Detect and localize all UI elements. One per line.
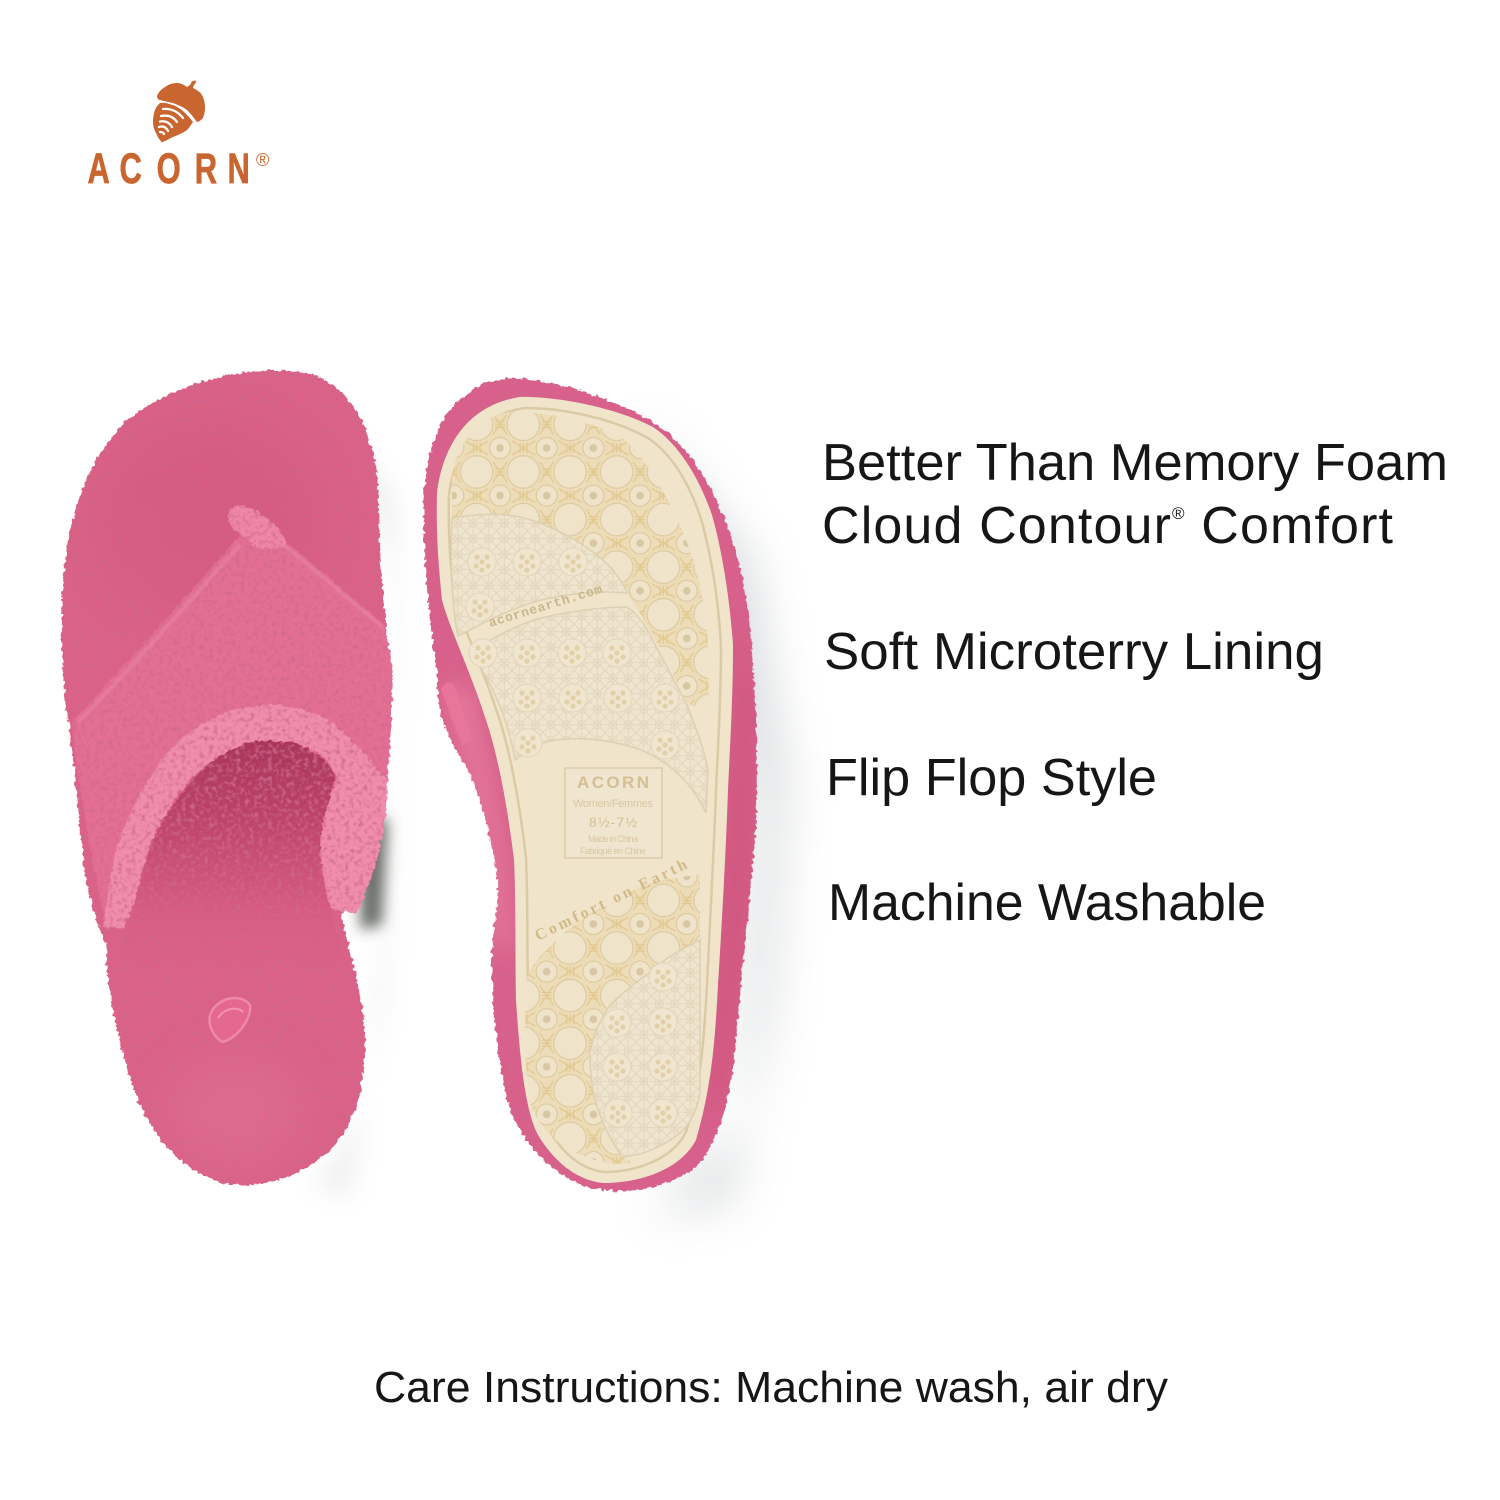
strap peeking out	[441, 682, 472, 745]
feature: memory foam: Better Than Memory Foam	[822, 434, 1448, 492]
strap	[72, 505, 393, 932]
sole website text: acornearth.com	[487, 582, 604, 631]
care instructions: Care Instructions: Machine wash, air dry	[374, 1363, 1168, 1412]
terry edge of sole	[423, 378, 757, 1191]
heel tread	[525, 875, 700, 1164]
thong post	[228, 506, 286, 549]
midfoot lobe B tread	[470, 607, 708, 813]
slipper footbed	[62, 370, 392, 1185]
inner foot well shading	[120, 740, 345, 965]
forefoot shading	[100, 420, 320, 620]
icon: embossed acorn on heel	[210, 998, 250, 1042]
registered mark: ®	[256, 150, 269, 170]
logo wordmark: ACORN	[87, 144, 250, 192]
logo: Acorn	[87, 81, 269, 192]
sole size label: ACORN	[577, 773, 649, 792]
feature: cloud contour: Cloud Contour	[822, 497, 1171, 555]
strap trim	[103, 705, 387, 928]
heel bumps	[603, 963, 677, 1127]
feature: style: Flip Flop Style	[826, 749, 1157, 807]
lighter terry left side	[445, 680, 510, 950]
feature list	[822, 434, 1448, 932]
left slipper: top view	[62, 370, 393, 1185]
heel fine tread	[590, 940, 700, 1157]
right slipper: sole view	[423, 378, 757, 1191]
feature: washable: Machine Washable	[828, 874, 1266, 932]
icon: acorn	[153, 81, 205, 142]
strap edge highlight	[78, 545, 384, 722]
sole inner groove	[449, 408, 721, 1172]
sole size label: Made in China	[588, 834, 638, 844]
sole size label: Fabriqué en Chine	[580, 846, 646, 856]
shadows behind slippers	[310, 420, 785, 1215]
heel shading	[214, 1097, 256, 1124]
cream sole	[437, 397, 733, 1183]
sole size label: 8½-7½	[589, 814, 637, 830]
feature: cloud contour: ®	[1172, 504, 1185, 523]
sole slogan text: Comfort on Earth	[532, 856, 690, 945]
forefoot tread	[452, 412, 709, 712]
sole size label	[565, 768, 662, 858]
feature: lining: Soft Microterry Lining	[824, 623, 1324, 681]
sole size label: Women/Femmes	[573, 798, 654, 810]
feature: cloud contour: Comfort	[1186, 497, 1394, 555]
darker terry right side	[716, 650, 757, 1104]
midfoot bumps	[466, 548, 679, 759]
midfoot lobe A tread	[451, 514, 627, 636]
